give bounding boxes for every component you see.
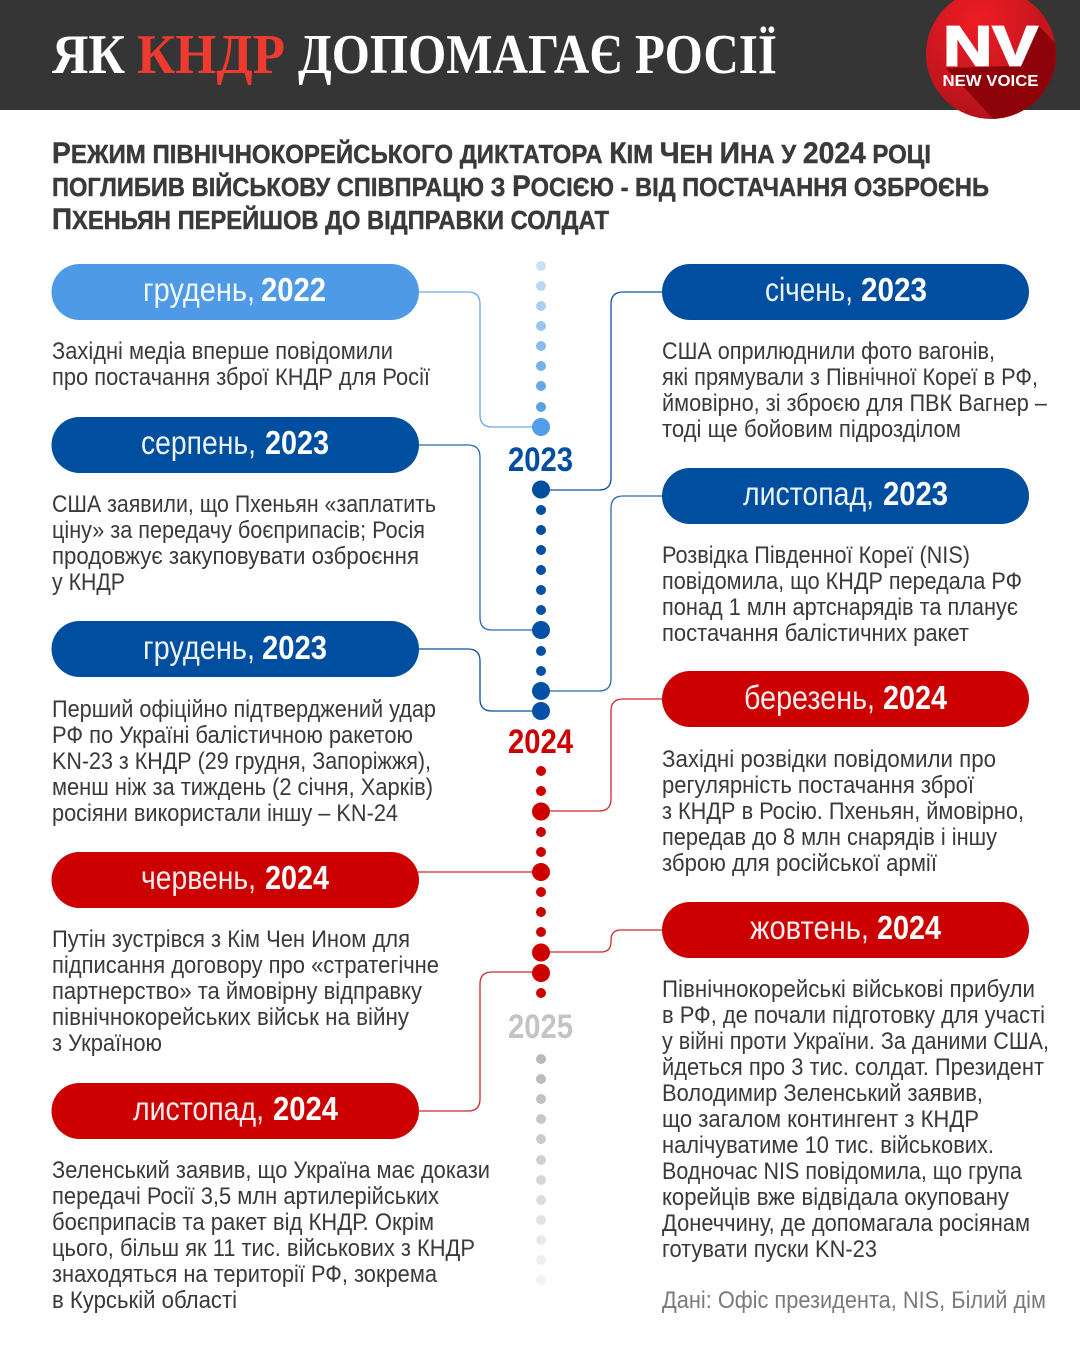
text: листопад 2024: боєприпасів та ракет від КНДР. Окрім bbox=[52, 1209, 434, 1236]
text: червень 2024: партнерство» та ймовірну відправку bbox=[52, 978, 422, 1005]
text: листопад 2023 bbox=[662, 542, 1022, 647]
pill: січень 2023 bbox=[662, 264, 1029, 320]
pill: грудень 2023: 2023 bbox=[262, 629, 327, 666]
title bbox=[52, 24, 777, 86]
text: жовтень 2024: Водночас NIS повідомила, що група bbox=[662, 1158, 1023, 1185]
text: грудень 2023: Перший офіційно підтверджений удар bbox=[52, 696, 436, 723]
panel: червень 2024 bbox=[52, 852, 439, 1057]
panel: листопад 2024 bbox=[52, 1083, 490, 1314]
text: листопад 2024: передачі Росії 3,5 млн артилерійських bbox=[52, 1183, 439, 1210]
year label 2024: 2024 bbox=[508, 723, 573, 761]
text: червень 2024: Путін зустрівся з Кім Чен Ином для bbox=[52, 926, 410, 953]
pill: жовтень 2024 bbox=[662, 902, 1029, 958]
panel: листопад 2023 bbox=[662, 468, 1029, 647]
pill: грудень 2022 bbox=[52, 264, 419, 320]
text: червень 2024 bbox=[52, 926, 439, 1057]
text: березень 2024: передав до 8 млн снарядів і іншу bbox=[662, 824, 997, 851]
text: серпень 2023: ціну» за передачу боєприпасів; Росія bbox=[52, 517, 425, 544]
text: січень 2023: тоді ще бойовим підрозділом bbox=[662, 416, 961, 443]
text: березень 2024: з КНДР в Росію. Пхеньян, ймовірно, bbox=[662, 798, 1024, 825]
title: ДОПОМАГАЄ РОСІЇ bbox=[298, 24, 777, 86]
text: серпень 2023: США заявили, що Пхеньян «заплатить bbox=[52, 491, 436, 518]
text: жовтень 2024: Північнокорейські військові прибули bbox=[662, 976, 1035, 1003]
pill: листопад 2023: листопад, bbox=[743, 475, 874, 512]
text: грудень 2023: росіяни використали іншу – KN-24 bbox=[52, 800, 398, 827]
text: листопад 2023: постачання балістичних ракет bbox=[662, 620, 969, 647]
panel: березень 2024 bbox=[662, 671, 1029, 877]
text: січень 2023: ймовірно, зі зброєю для ПВК Вагнер – bbox=[662, 390, 1048, 417]
subtitle: ПХЕНЬЯН ПЕРЕЙШОВ ДО ВІДПРАВКИ СОЛДАТ bbox=[52, 203, 609, 236]
panel: грудень 2023 bbox=[52, 621, 436, 827]
pill: червень 2024: червень, bbox=[141, 859, 256, 896]
pill: січень 2023: січень, bbox=[765, 271, 853, 308]
pill: червень 2024: 2024 bbox=[265, 859, 330, 896]
logo: NV New Voice: NV bbox=[943, 14, 1038, 78]
text: жовтень 2024: у війні проти України. За даними США, bbox=[662, 1028, 1049, 1055]
text: грудень 2023: KN-23 з КНДР (29 грудня, Запоріжжя), bbox=[52, 748, 431, 775]
title: ЯК bbox=[52, 24, 125, 86]
text: листопад 2024 bbox=[52, 1157, 490, 1314]
text: жовтень 2024: Володимир Зеленський заявив, bbox=[662, 1080, 983, 1107]
pill: серпень 2023: серпень, bbox=[141, 424, 256, 461]
subtitle: РЕЖИМ ПІВНІЧНОКОРЕЙСЬКОГО ДИКТАТОРА КІМ ЧЕН ИНА У 2024 РОЦІ bbox=[52, 137, 931, 170]
text: грудень 2023 bbox=[52, 696, 436, 827]
text: червень 2024: північнокорейських військ на війну bbox=[52, 1004, 409, 1031]
text: грудень 2022 bbox=[52, 338, 430, 391]
pill: жовтень 2024: 2024 bbox=[877, 909, 942, 946]
timeline dots bbox=[532, 261, 550, 1285]
text: жовтень 2024: налічуватиме 10 тис. військових. bbox=[662, 1132, 994, 1159]
subtitle: ПОГЛИБИВ ВІЙСЬКОВУ СПІВПРАЦЮ З РОСІЄЮ - ВІД ПОСТАЧАННЯ ОЗБРОЄНЬ bbox=[52, 170, 989, 203]
text: листопад 2024: в Курській області bbox=[52, 1287, 237, 1314]
pill: листопад 2024: 2024 bbox=[273, 1090, 339, 1127]
pill: грудень 2023 bbox=[52, 621, 419, 677]
text: грудень 2022: про постачання зброї КНДР для Росії bbox=[52, 364, 430, 391]
pill: січень 2023: 2023 bbox=[861, 271, 927, 308]
pill: червень 2024 bbox=[52, 852, 419, 908]
pill: листопад 2024: листопад, bbox=[133, 1090, 264, 1127]
text: жовтень 2024 bbox=[662, 976, 1049, 1263]
text: грудень 2022: Західні медіа вперше повідомили bbox=[52, 338, 393, 365]
panel: грудень 2022 bbox=[52, 264, 430, 391]
text: листопад 2023: понад 1 млн артснарядів та планує bbox=[662, 594, 1018, 621]
logo: NV New Voice bbox=[926, 0, 1060, 124]
year label 2025: 2025 bbox=[508, 1008, 573, 1046]
panel: серпень 2023 bbox=[52, 417, 436, 596]
logo: NV New Voice: NEW VOICE bbox=[942, 73, 1038, 90]
pill: листопад 2024 bbox=[52, 1083, 419, 1139]
text: жовтень 2024: Донеччину, де допомагала росіянам bbox=[662, 1210, 1030, 1237]
subtitle bbox=[52, 137, 989, 236]
pill: листопад 2023 bbox=[662, 468, 1029, 524]
source note: Дані: Офіс президента, NIS, Білий дім bbox=[662, 1287, 1046, 1314]
pill: грудень 2023: грудень, bbox=[143, 629, 255, 666]
pill: березень 2024: березень, bbox=[744, 679, 875, 716]
text: грудень 2023: РФ по Україні балістичною ракетою bbox=[52, 722, 413, 749]
text: червень 2024: підписання договору про «стратегічне bbox=[52, 952, 439, 979]
text: березень 2024 bbox=[662, 746, 1024, 877]
text: серпень 2023: у КНДР bbox=[52, 569, 125, 596]
text: жовтень 2024: готувати пуски KN-23 bbox=[662, 1236, 877, 1263]
text: листопад 2024: цього, більш як 11 тис. військових з КНДР bbox=[52, 1235, 475, 1262]
header bar bbox=[0, 0, 1080, 110]
text: жовтень 2024: йдеться про 3 тис. солдат. Президент bbox=[662, 1054, 1044, 1081]
pill: березень 2024 bbox=[662, 671, 1029, 727]
text: жовтень 2024: в РФ, де почали підготовку для участі bbox=[662, 1002, 1045, 1029]
pill: березень 2024: 2024 bbox=[883, 679, 948, 716]
text: серпень 2023: продовжує закуповувати озброєння bbox=[52, 543, 419, 570]
text: березень 2024: зброю для російської армії bbox=[662, 850, 937, 877]
text: листопад 2024: знаходяться на території РФ, зокрема bbox=[52, 1261, 438, 1288]
pill: жовтень 2024: жовтень, bbox=[750, 909, 869, 946]
pill: грудень 2022: грудень, bbox=[143, 271, 255, 308]
text: березень 2024: Західні розвідки повідомили про bbox=[662, 746, 996, 773]
text: листопад 2023: повідомила, що КНДР передала РФ bbox=[662, 568, 1022, 595]
year label 2023: 2023 bbox=[508, 441, 573, 479]
text: жовтень 2024: що загалом контингент з КНДР bbox=[662, 1106, 979, 1133]
text: листопад 2023: Розвідка Південної Кореї (NIS) bbox=[662, 542, 970, 569]
panel: січень 2023 bbox=[662, 264, 1048, 443]
title: КНДР bbox=[137, 24, 285, 86]
text: жовтень 2024: корейців вже відвідала окуповану bbox=[662, 1184, 1009, 1211]
pill: серпень 2023: 2023 bbox=[265, 424, 329, 461]
text: червень 2024: з Україною bbox=[52, 1030, 162, 1057]
pill: листопад 2023: 2023 bbox=[883, 475, 948, 512]
text: березень 2024: регулярність постачання зброї bbox=[662, 772, 974, 799]
text: січень 2023: які прямували з Північної Кореї в РФ, bbox=[662, 364, 1038, 391]
pill: грудень 2022: 2022 bbox=[261, 271, 326, 308]
text: січень 2023 bbox=[662, 338, 1048, 443]
text: листопад 2024: Зеленський заявив, що Україна має докази bbox=[52, 1157, 490, 1184]
text: січень 2023: США оприлюднили фото вагонів, bbox=[662, 338, 995, 365]
connector lines bbox=[418, 292, 662, 1111]
text: грудень 2023: менш ніж за тиждень (2 січня, Харків) bbox=[52, 774, 433, 801]
pill: серпень 2023 bbox=[52, 417, 419, 473]
text: серпень 2023 bbox=[52, 491, 436, 596]
panel: жовтень 2024 bbox=[662, 902, 1049, 1263]
